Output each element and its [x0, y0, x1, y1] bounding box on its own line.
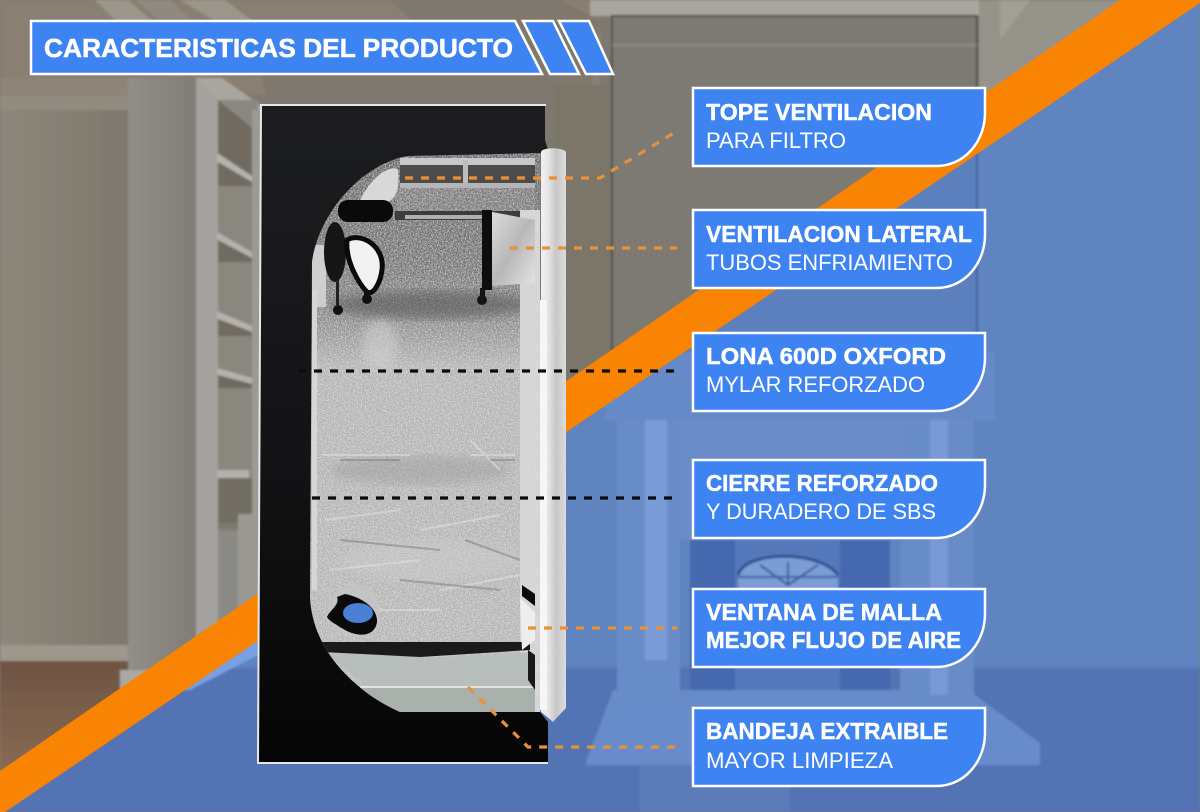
tent black frame [258, 105, 549, 763]
card: ventilacion lateral [693, 210, 985, 288]
card: bandeja: MAYOR LIMPIEZA [706, 748, 893, 773]
card: lona [693, 333, 985, 411]
card: bandeja: BANDEJA EXTRAIBLE [706, 718, 948, 744]
leader: ventilacion lateral [510, 246, 677, 250]
leader: cierre [312, 496, 677, 500]
card: tope ventilacion: PARA FILTRO [706, 128, 846, 153]
card: tope ventilacion: TOPE VENTILACION [706, 99, 932, 125]
zipper roll [540, 148, 566, 722]
leader: lona [298, 369, 677, 373]
card: cierre: CIERRE REFORZADO [706, 470, 938, 496]
tent interior silver lining [305, 150, 545, 720]
card: ventilacion lateral: TUBOS ENFRIAMIENTO [706, 250, 953, 275]
title: CARACTERISTICAS DEL PRODUCTO [44, 33, 513, 63]
lower right zipper flap [522, 585, 535, 606]
card: tope ventilacion [693, 88, 985, 166]
product: grow tent [258, 105, 566, 763]
removable tray [326, 650, 532, 686]
leader: ventana [528, 626, 677, 630]
card: ventana de malla [693, 589, 985, 667]
lining wrinkles [322, 440, 520, 610]
title banner [31, 21, 613, 74]
card: cierre [693, 460, 985, 538]
card: ventilacion lateral: VENTILACION LATERAL [706, 221, 972, 247]
card: ventana de malla: VENTANA DE MALLA [706, 599, 942, 625]
card: lona: LONA 600D OXFORD [706, 343, 946, 369]
leader: bandeja [468, 687, 677, 747]
tray seam [322, 642, 530, 657]
mesh window [327, 584, 380, 636]
right vent sleeve and strap [477, 210, 535, 305]
card: cierre: Y DURADERO DE SBS [706, 499, 936, 524]
card: lona: MYLAR REFORZADO [706, 372, 925, 397]
leader: tope ventilacion [405, 131, 677, 178]
card: ventana de malla: MEJOR FLUJO DE AIRE [706, 627, 961, 653]
card: bandeja [693, 708, 985, 786]
left vent straps [324, 200, 393, 315]
tent white outline [258, 105, 548, 763]
